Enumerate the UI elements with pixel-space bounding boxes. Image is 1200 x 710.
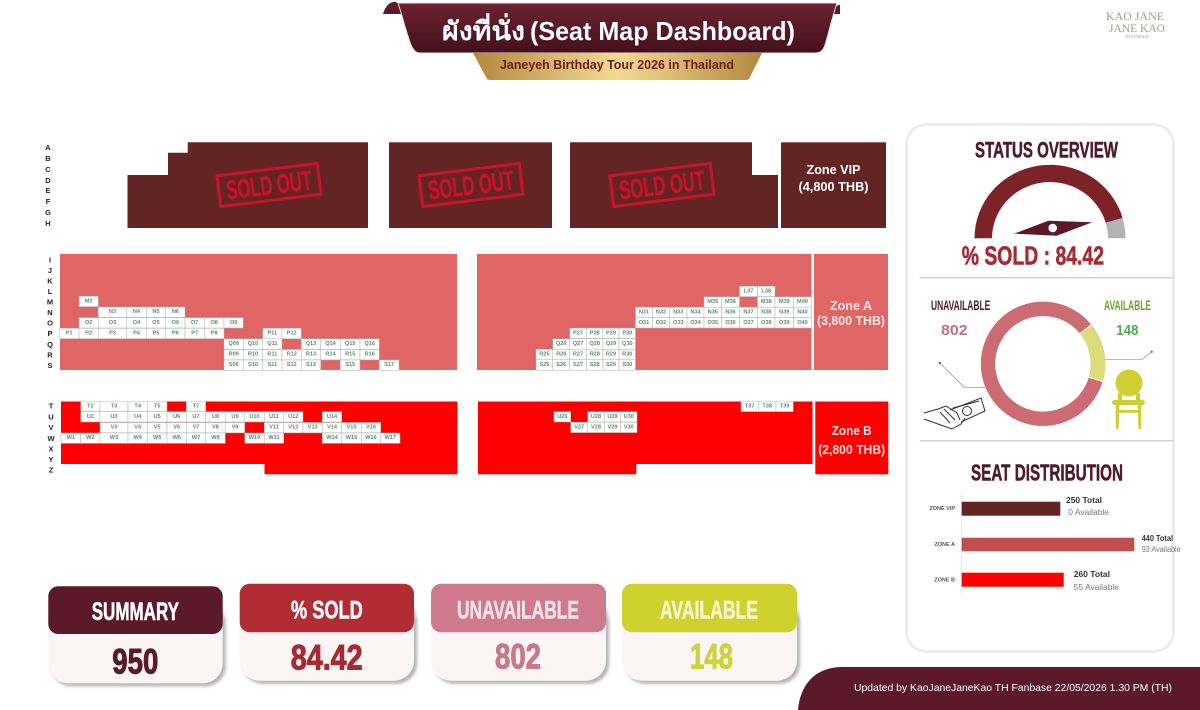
zone B left seats: W7 xyxy=(192,435,200,441)
donut label: unavailable: UNAVAILABLE xyxy=(931,298,990,313)
footer bar xyxy=(798,667,1200,710)
zone A left seats: P7 xyxy=(191,330,198,336)
zone B left seats: V13 xyxy=(308,425,318,431)
zone A right seats: R30 xyxy=(622,352,632,358)
row labels A-H xyxy=(45,143,51,228)
gauge needle xyxy=(1014,221,1092,236)
zone A left seats: P8 xyxy=(211,330,218,336)
zone B left seats: W15 xyxy=(346,435,357,441)
zone B right seats: T37 xyxy=(745,403,755,409)
zone A label: (3,800 THB) xyxy=(817,313,885,328)
row labels I-S: S xyxy=(47,361,53,370)
zone A right seats: P28 xyxy=(590,330,600,336)
zone A left seats: S11 xyxy=(268,362,277,368)
bar: zone VIP: ZONE VIP xyxy=(929,506,955,512)
zone A right seats: N34 xyxy=(690,309,702,315)
zone A label: Zone A xyxy=(830,298,873,313)
zone A right seats: O35 xyxy=(708,320,718,326)
logo: KAO JANE xyxy=(1106,9,1164,23)
row labels A-H: A xyxy=(45,143,51,152)
logo xyxy=(1106,9,1165,39)
zone VIP block left xyxy=(128,142,368,228)
zone B left seats: W4 xyxy=(134,435,143,441)
zone A right seats: L37 xyxy=(744,288,753,294)
heading: seat distribution: SEAT DISTRIBUTION xyxy=(971,460,1123,486)
zone B right seats: V29 xyxy=(608,424,617,430)
zone A right seats: M38 xyxy=(761,299,772,305)
card: summary: SUMMARY xyxy=(92,598,179,626)
row labels A-H: E xyxy=(45,186,51,195)
row labels T-Z: W xyxy=(47,434,55,443)
zone A left seats: Q10 xyxy=(248,341,258,347)
zone VIP block right xyxy=(570,142,778,228)
zone B right seats: V30 xyxy=(624,424,634,430)
zone A right seats: R29 xyxy=(606,352,616,358)
zone A right seats: N40 xyxy=(797,309,808,315)
zone A left seats: S13 xyxy=(306,362,316,368)
zone B label: Zone B xyxy=(832,423,872,438)
zone B left seats: W6 xyxy=(173,435,181,441)
zone A right seats: Q28 xyxy=(589,341,600,347)
row labels I-S: K xyxy=(47,276,53,286)
footer bar: Updated by KaoJaneJaneKao TH Fanbase 22/05/2026 1.30 PM (TH) xyxy=(854,682,1172,694)
sold out stamp: SOLD OUT xyxy=(427,165,516,206)
zone A right seats: N35 xyxy=(708,309,718,315)
donut label: available: 148 xyxy=(1116,322,1138,339)
sold out stamp: SOLD OUT xyxy=(618,165,707,206)
card: percent sold: 84.42 xyxy=(291,638,363,677)
bar: zone B xyxy=(934,569,1120,592)
zone B left seats: V3 xyxy=(111,425,117,431)
zone A left seats: S12 xyxy=(287,362,297,368)
zone B left seats: U3 xyxy=(110,414,118,420)
zone A right seats: M36 xyxy=(725,299,736,305)
row labels A-H: F xyxy=(46,197,51,206)
zone B left seats: V16 xyxy=(366,425,376,431)
zone B left seats: U6 xyxy=(173,414,180,420)
row labels I-S: N xyxy=(47,308,53,317)
card: available: AVAILABLE xyxy=(660,597,758,625)
card: percent sold: % SOLD xyxy=(291,597,363,625)
zone A right seats: N38 xyxy=(761,309,771,315)
zone A right seats: M35 xyxy=(707,299,718,305)
zone A right seats: Q30 xyxy=(622,341,633,347)
bar: zone VIP: 250 Total xyxy=(1066,495,1102,505)
zone B left seats: V7 xyxy=(193,425,199,431)
zone B left seats: W16 xyxy=(365,435,377,441)
subtitle ribbon: Janeyeh Birthday Tour 2026 in Thailand xyxy=(500,57,734,72)
zone A right seats: M39 xyxy=(779,299,790,305)
zone B left seats: W1 xyxy=(67,435,75,441)
zone B right seats xyxy=(554,401,793,433)
zone A right seats: N32 xyxy=(656,309,666,315)
zone B right seats: T38 xyxy=(762,403,772,409)
zone B left seats: U10 xyxy=(249,414,260,420)
zone A left seats: Q13 xyxy=(306,341,316,347)
zone A left seats: S09 xyxy=(229,362,239,368)
title banner xyxy=(383,2,840,53)
bar chart xyxy=(929,490,1181,598)
banner title text: ผังที่นั่ง xyxy=(442,12,525,46)
donut label: unavailable: 802 xyxy=(941,322,968,339)
donut chart xyxy=(988,309,1103,419)
zone A right seats: S27 xyxy=(573,362,583,368)
zone B left seats: U9 xyxy=(231,414,239,420)
sold out stamp: SOLD OUT xyxy=(225,165,314,206)
zone A left seats: Q14 xyxy=(325,341,337,347)
zone B left seats: U8 xyxy=(212,414,219,420)
logo: JANE KAO xyxy=(1109,21,1165,35)
zone B left seats: W10 xyxy=(249,435,260,441)
zone B left seats: U5 xyxy=(154,414,161,420)
zone A left seats: S10 xyxy=(248,362,258,368)
row labels I-S: Q xyxy=(47,340,53,349)
zone VIP label: (4,800 THB) xyxy=(798,179,868,194)
zone B right seats: T39 xyxy=(780,403,790,409)
zone A left seats: P6 xyxy=(172,330,179,336)
zone B right seats: U30 xyxy=(624,414,634,420)
zone A right seats: N36 xyxy=(725,309,736,315)
zone A right seats: Q27 xyxy=(573,341,583,347)
row labels I-S: R xyxy=(47,350,53,360)
row labels A-H: D xyxy=(45,176,51,185)
zone A right seats: P30 xyxy=(622,330,632,336)
zone A right seats: O37 xyxy=(743,320,754,326)
sold out stamp xyxy=(419,163,523,207)
zone A right seats: O34 xyxy=(690,320,702,326)
zone A left seats: O7 xyxy=(191,320,198,326)
zone A left seats: Q09 xyxy=(228,341,239,347)
zone B right seats: U29 xyxy=(607,414,618,420)
zone A left seats: R11 xyxy=(267,352,277,358)
row labels A-H: G xyxy=(45,208,51,217)
zone B left seats: U4 xyxy=(134,414,142,420)
zone B left seats: W11 xyxy=(268,435,280,441)
zone B right seats: U28 xyxy=(591,414,601,420)
zone A left seats: N3 xyxy=(109,309,116,315)
card: unavailable xyxy=(431,584,606,681)
zone A right seats: O36 xyxy=(725,320,736,326)
row labels I-S: P xyxy=(47,329,53,338)
zone B left seats: W8 xyxy=(211,435,220,441)
zone A right seats: O39 xyxy=(779,320,790,326)
bar: zone A xyxy=(934,533,1181,554)
zone A left seats: R14 xyxy=(325,352,337,358)
zone B left seats: U12 xyxy=(288,414,298,420)
zone A right seats: Q26 xyxy=(556,341,566,347)
row labels T-Z: U xyxy=(48,412,54,422)
card: summary: 950 xyxy=(112,643,158,682)
card: unavailable: 802 xyxy=(495,638,541,676)
row labels I-S: O xyxy=(47,318,53,328)
zone A left seats: M2 xyxy=(85,298,93,304)
zone A left seats: P3 xyxy=(109,330,116,336)
zone B left seats xyxy=(61,401,400,443)
zone A left seats: P1 xyxy=(66,330,73,336)
banner title text xyxy=(442,12,795,46)
zone B left seats: V4 xyxy=(134,425,142,431)
zone A left seats: R15 xyxy=(345,352,355,358)
row labels T-Z xyxy=(47,402,55,475)
logo: TH FANBASE xyxy=(1125,34,1150,39)
zone A right seats: N31 xyxy=(639,309,649,315)
zone A left seats: Q15 xyxy=(345,341,355,347)
bar: zone A: 440 Total xyxy=(1142,533,1173,543)
zone B left seats: V8 xyxy=(212,425,219,431)
zone A right seats: N39 xyxy=(779,309,789,315)
zone A left seats: P4 xyxy=(133,330,141,336)
zone B left seats: U7 xyxy=(192,414,200,420)
bar: zone B: 260 Total xyxy=(1074,569,1110,579)
zone A right seats: O38 xyxy=(761,320,772,326)
zone A right seats: L38 xyxy=(761,288,771,294)
zone B left seats: V9 xyxy=(232,425,238,431)
zone B left seats: V11 xyxy=(269,425,279,431)
zone A right seats: S30 xyxy=(622,362,632,368)
zone A right seats: R25 xyxy=(539,352,550,358)
zone A right seats: S29 xyxy=(606,362,616,368)
zone B left seats: U14 xyxy=(327,414,338,420)
zone A right seats: S25 xyxy=(539,362,549,368)
zone B left seats: T7 xyxy=(193,403,199,409)
zone B left seats: W2 xyxy=(86,435,94,441)
row labels T-Z: Y xyxy=(48,455,54,464)
zone A right seats: S28 xyxy=(590,362,600,368)
row labels T-Z: Z xyxy=(49,466,54,475)
zone VIP block centre xyxy=(389,142,552,228)
row labels I-S: I xyxy=(49,256,51,264)
zone B left seats: W3 xyxy=(110,435,118,441)
bar: zone VIP xyxy=(929,495,1110,517)
zone A left seats: R09 xyxy=(229,352,239,358)
zone A right seats: P27 xyxy=(573,330,583,336)
zone B left seats: W17 xyxy=(385,435,396,441)
zone A right seats: N33 xyxy=(673,309,683,315)
zone A right seats: R28 xyxy=(590,352,600,358)
zone A left seats: O9 xyxy=(230,320,237,326)
zone B left seats: V6 xyxy=(173,425,180,431)
zone A left block xyxy=(60,254,457,370)
zone A left seats: R13 xyxy=(306,352,316,358)
zone A left seats: S15 xyxy=(345,362,355,368)
sold out stamp xyxy=(610,163,714,207)
zone A left seats: R16 xyxy=(365,352,375,358)
leader line: unavailable xyxy=(939,362,987,387)
banner title text: (Seat Map Dashboard) xyxy=(530,16,795,46)
icon: hand with money xyxy=(924,398,985,429)
row labels T-Z: T xyxy=(49,402,54,411)
zone B left seats: U2 xyxy=(87,414,94,420)
zone A left seats: P2 xyxy=(85,330,92,336)
bar: zone VIP: 0 Available xyxy=(1068,508,1110,517)
zone A left seats: O3 xyxy=(109,320,116,326)
zone B left seats: T3 xyxy=(111,403,117,409)
zone A right seats: N37 xyxy=(743,309,754,315)
zone B left seats: U11 xyxy=(269,414,279,420)
zone B left seats: W14 xyxy=(326,435,339,441)
zone B right seats: U26 xyxy=(557,414,568,420)
zone A left seats xyxy=(60,296,399,370)
zone A right seats: S26 xyxy=(556,362,566,368)
bar: zone A: ZONE A xyxy=(934,542,955,548)
zone B left seats: V12 xyxy=(288,425,298,431)
row labels T-Z: X xyxy=(48,445,54,454)
zone A right seats: O40 xyxy=(797,320,808,326)
panel: status sidebar xyxy=(906,124,1181,652)
zone B right seats: V27 xyxy=(574,424,584,430)
row labels T-Z: V xyxy=(48,423,54,432)
gauge xyxy=(974,165,1126,238)
zone A left seats: R12 xyxy=(287,352,297,358)
donut label: available xyxy=(1104,298,1151,339)
zone B left seats: T5 xyxy=(154,403,160,409)
zone A right seats: M40 xyxy=(797,299,808,305)
zone A left seats: Q16 xyxy=(364,341,375,347)
card: available: 148 xyxy=(690,638,733,676)
zone A right seats: O33 xyxy=(673,320,684,326)
zone A right block xyxy=(477,254,812,370)
card: percent sold xyxy=(240,584,414,681)
zone A left seats: O6 xyxy=(172,320,179,326)
zone A right seats: R26 xyxy=(556,352,566,358)
zone A right seats: P29 xyxy=(606,330,616,336)
zone A left seats: S17 xyxy=(384,362,394,368)
zone A left seats: O8 xyxy=(210,320,218,326)
zone A left seats: O5 xyxy=(152,320,160,326)
zone B left seats: T2 xyxy=(87,403,94,409)
zone A right seats: O31 xyxy=(639,320,649,326)
zone A right seats: O32 xyxy=(656,320,666,326)
row labels A-H: B xyxy=(45,154,51,163)
subtitle ribbon xyxy=(473,53,762,80)
zone A left seats: N6 xyxy=(172,309,179,315)
row labels I-S xyxy=(47,256,53,370)
zone A right seats: R27 xyxy=(573,352,583,358)
leader line: available xyxy=(1105,351,1153,359)
donut label: unavailable xyxy=(931,298,990,339)
icon: chair xyxy=(1112,370,1145,429)
sold out stamp xyxy=(217,163,321,207)
card: unavailable: UNAVAILABLE xyxy=(457,597,579,625)
zone A left seats: O2 xyxy=(85,320,92,326)
row labels I-S: M xyxy=(47,298,53,306)
heading: status overview: STATUS OVERVIEW xyxy=(975,138,1118,163)
zone A left seats: N5 xyxy=(152,309,160,315)
percent sold readout: % SOLD : 84.42 xyxy=(962,240,1104,270)
zone B left seats: W5 xyxy=(153,435,161,441)
row labels I-S: J xyxy=(48,266,52,275)
bar: zone B: 55 Available xyxy=(1074,583,1120,592)
zone A left seats: Q11 xyxy=(267,341,278,347)
zone B label: (2,800 THB) xyxy=(818,442,885,457)
donut label: available: AVAILABLE xyxy=(1104,298,1151,313)
zone VIP label xyxy=(781,142,886,228)
zone B left seats: V5 xyxy=(154,425,161,431)
zone B right block xyxy=(478,402,812,474)
zone B left seats: V14 xyxy=(327,425,338,431)
zone A left seats: O4 xyxy=(133,320,141,326)
zone A right seats: Q29 xyxy=(606,341,616,347)
zone A left seats: R10 xyxy=(248,352,258,358)
zone B left seats: V15 xyxy=(347,425,356,431)
zone A left seats: P11 xyxy=(268,330,277,336)
zone B label xyxy=(815,402,888,474)
zone VIP label: Zone VIP xyxy=(806,162,861,177)
zone B right seats: V28 xyxy=(591,424,601,430)
zone A label xyxy=(814,254,888,370)
zone A right seats xyxy=(536,286,812,370)
zone A left seats: P12 xyxy=(287,330,297,336)
bar: zone B: ZONE B xyxy=(934,578,955,584)
row labels I-S: L xyxy=(48,287,53,296)
card: summary xyxy=(48,586,223,683)
row labels A-H: H xyxy=(45,219,51,228)
zone A left seats: P5 xyxy=(153,330,159,336)
zone A left seats: N4 xyxy=(133,309,141,315)
bar: zone A: 93 Available xyxy=(1142,545,1181,554)
row labels A-H: C xyxy=(45,165,51,174)
zone B left seats: T4 xyxy=(134,403,142,409)
zone B left block xyxy=(61,402,458,474)
card: available xyxy=(622,584,797,681)
